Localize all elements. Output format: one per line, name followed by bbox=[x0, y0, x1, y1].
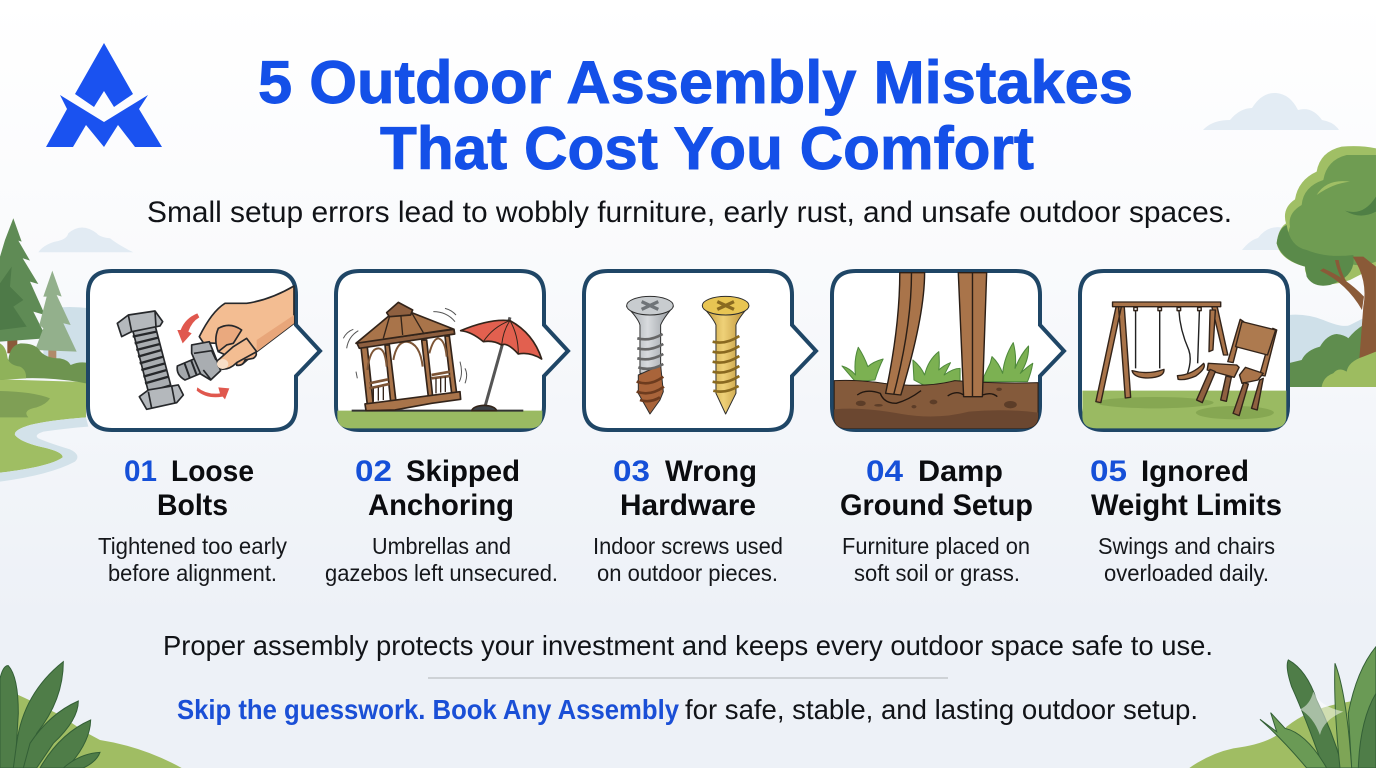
step 1 label: Loose bbox=[171, 455, 254, 488]
icon: posts sinking into soil bbox=[834, 273, 1038, 428]
step 3 description bbox=[593, 533, 783, 586]
right landscape scene bbox=[1203, 93, 1376, 387]
step 3 label: Hardware bbox=[620, 489, 756, 522]
call to action bbox=[177, 694, 1198, 725]
distant hill right bbox=[1288, 315, 1376, 380]
left landscape scene bbox=[0, 218, 133, 482]
step 2 label: Skipped bbox=[406, 455, 520, 488]
logo bbox=[46, 43, 162, 147]
step 4 description: Furniture placed on bbox=[842, 533, 1030, 559]
step 2 description: gazebos left unsecured. bbox=[325, 560, 558, 586]
step 4 description: soft soil or grass. bbox=[854, 560, 1020, 586]
step 5 description: Swings and chairs bbox=[1098, 533, 1275, 559]
step 2 label: Anchoring bbox=[368, 489, 514, 522]
step 1 description: Tightened too early bbox=[98, 533, 287, 559]
icon: rusty screw and brass screw bbox=[627, 296, 749, 414]
card 2: skipped anchoring bbox=[336, 271, 568, 430]
step 3 label: Wrong bbox=[665, 455, 757, 488]
step 4 label bbox=[840, 455, 1033, 586]
step 5 description bbox=[1098, 533, 1275, 586]
step 3 description: Indoor screws used bbox=[593, 533, 783, 559]
title: That Cost You Comfort bbox=[380, 115, 1034, 182]
bushes bbox=[0, 343, 86, 383]
pine tree small bbox=[35, 271, 77, 360]
card 3: wrong hardware bbox=[584, 271, 816, 430]
sparkle watermark bbox=[1300, 692, 1343, 735]
card 4: damp ground setup bbox=[832, 271, 1064, 430]
step 1 description: before alignment. bbox=[108, 560, 277, 586]
step 5 description: overloaded daily. bbox=[1104, 560, 1269, 586]
cloud top right bbox=[1203, 93, 1339, 130]
step 2 description bbox=[325, 533, 558, 586]
title: 5 Outdoor Assembly Mistakes bbox=[258, 49, 1133, 116]
step 1 description bbox=[98, 533, 287, 586]
call to action: Skip the guesswork. Book Any Assembly bbox=[177, 694, 679, 725]
title bbox=[258, 49, 1133, 182]
subtitle: Small setup errors lead to wobbly furniture, early rust, and unsafe outdoor spaces. bbox=[147, 196, 1232, 229]
card 5: ignored weight limits bbox=[1080, 271, 1288, 430]
distant hill left bbox=[43, 307, 90, 373]
step 4 label: 04 bbox=[866, 455, 903, 488]
light front bush bbox=[1322, 352, 1376, 387]
meadow bbox=[0, 379, 86, 473]
step 3 description: on outdoor pieces. bbox=[597, 560, 778, 586]
cloud left bbox=[38, 227, 133, 252]
step 1 label: Bolts bbox=[157, 489, 228, 522]
bottom-right plant bbox=[1189, 647, 1376, 768]
step 4 label: Damp bbox=[918, 455, 1003, 488]
tree bbox=[1277, 146, 1376, 359]
bottom-left plant bbox=[0, 662, 182, 768]
pine tree large bbox=[0, 218, 47, 353]
meadow shadow bbox=[0, 391, 50, 417]
call to action: for safe, stable, and lasting outdoor setup. bbox=[685, 694, 1198, 725]
icon: swing set and broken chair bbox=[1082, 302, 1286, 428]
step 5 label: Weight Limits bbox=[1091, 489, 1282, 522]
step 4 label: Ground Setup bbox=[840, 489, 1033, 522]
step 2 label bbox=[325, 455, 558, 586]
icon: tilted gazebo and umbrella bbox=[337, 302, 542, 428]
step 2 label: 02 bbox=[355, 455, 392, 488]
icon: bolt and hand bbox=[117, 286, 294, 409]
step 5 label: Ignored bbox=[1141, 455, 1249, 488]
bushes right bbox=[1288, 323, 1376, 387]
river bbox=[0, 417, 88, 482]
card 1: loose bolts bbox=[88, 271, 320, 430]
closing statement: Proper assembly protects your investment and keeps every outdoor space safe to use. bbox=[163, 630, 1213, 661]
step 5 label bbox=[1090, 455, 1282, 586]
step 1 label bbox=[98, 455, 287, 586]
cloud behind tree bbox=[1242, 227, 1285, 250]
step 3 label: 03 bbox=[613, 455, 650, 488]
step 3 label bbox=[593, 455, 783, 586]
step 1 label: 01 bbox=[124, 455, 157, 488]
step 4 description bbox=[842, 533, 1030, 586]
step 5 label: 05 bbox=[1090, 455, 1127, 488]
step 2 description: Umbrellas and bbox=[372, 533, 511, 559]
